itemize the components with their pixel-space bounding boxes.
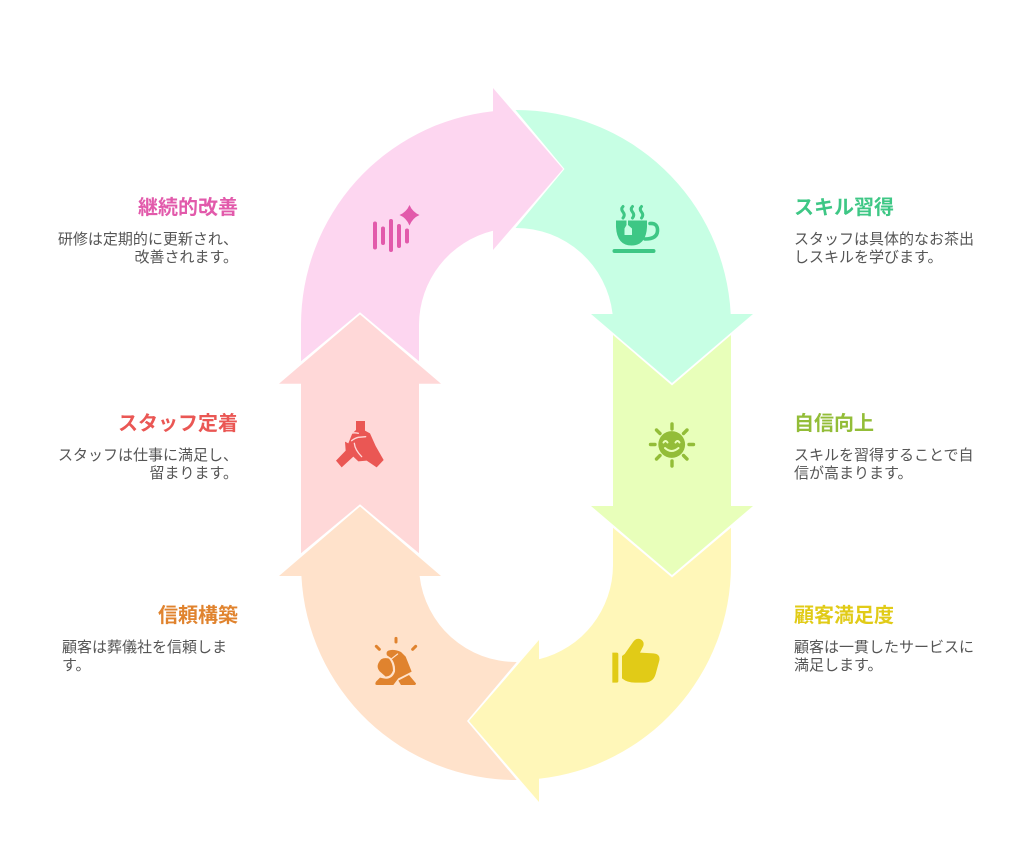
description: skill acquisition (794, 231, 974, 266)
description: confidence (794, 447, 974, 482)
heading: customer satisfaction: 顧客満足度 (794, 605, 894, 627)
icon: sound waves and sparkle (373, 205, 420, 252)
icon: thumbs up (612, 639, 660, 683)
description: trust building: 顧客は葬儀社を信頼しま (62, 639, 227, 656)
description: staff retention: スタッフは仕事に満足し、 (58, 447, 238, 464)
description: continuous improvement (58, 231, 238, 266)
arrow: trust building (orange) (279, 506, 517, 780)
heading: staff retention: スタッフ定着 (118, 413, 238, 435)
description: staff retention: 留まります。 (149, 465, 238, 482)
arrow: staff retention (salmon) (279, 314, 441, 553)
icon: smiling sun (650, 424, 694, 466)
heading: confidence: 自信向上 (794, 413, 874, 435)
description: confidence: スキルを習得することで自 (794, 447, 974, 464)
description: customer satisfaction: 満足します。 (794, 657, 883, 674)
arrow: skill acquisition (green) (516, 110, 753, 383)
description: customer satisfaction: 顧客は一貫したサービスに (794, 639, 974, 656)
description: trust building (62, 639, 227, 674)
description: continuous improvement: 改善されます。 (134, 249, 238, 266)
description: confidence: 信が高まります。 (794, 465, 913, 482)
text block: staff retention (58, 412, 238, 482)
icon: joined hands (336, 421, 384, 467)
description: continuous improvement: 研修は定期的に更新され、 (58, 231, 238, 248)
heading: trust building: 信頼構築 (158, 605, 238, 627)
text block: customer satisfaction (794, 604, 974, 674)
text block: continuous improvement (58, 196, 238, 266)
heading: skill acquisition: スキル習得 (794, 197, 894, 219)
text block: confidence (794, 412, 974, 482)
icon: fist bump with rays (375, 638, 416, 685)
icon: tea cup (612, 206, 658, 253)
arrow: customer satisfaction (yellow) (469, 528, 731, 802)
description: skill acquisition: スタッフは具体的なお茶出 (794, 231, 974, 248)
heading: continuous improvement: 継続的改善 (138, 197, 238, 219)
description: customer satisfaction (794, 639, 974, 674)
description: staff retention (58, 447, 238, 482)
text block: trust building (62, 604, 238, 674)
description: skill acquisition: しスキルを学びます。 (794, 249, 943, 266)
arrow: continuous improvement (pink) (301, 88, 563, 361)
text block: skill acquisition (794, 196, 974, 266)
description: trust building: す。 (62, 657, 91, 674)
arrow: confidence (lime) (591, 335, 753, 575)
